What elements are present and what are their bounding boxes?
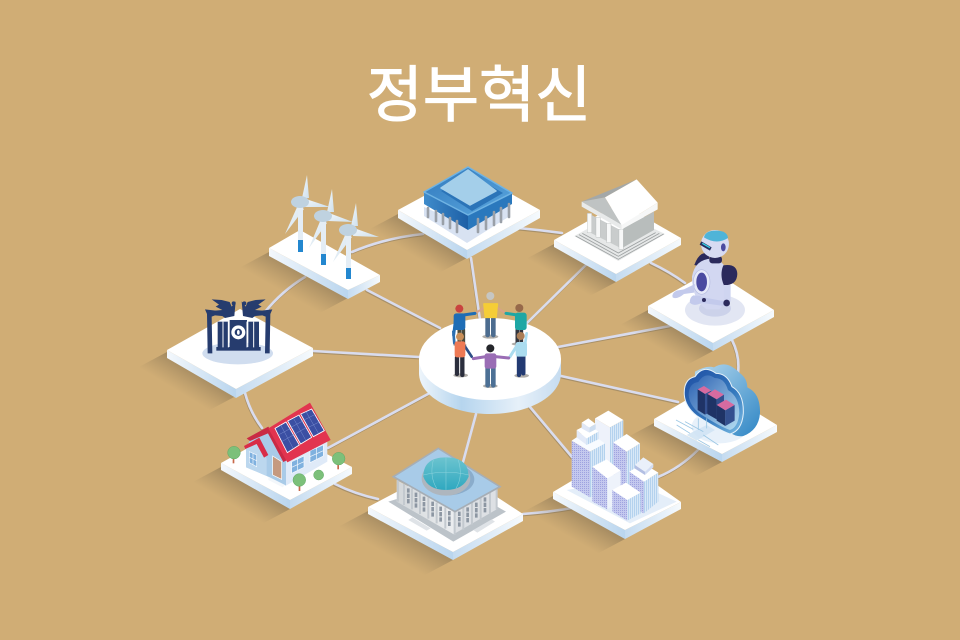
panel: solar house platform xyxy=(191,403,352,525)
panel: crest platform xyxy=(137,299,313,412)
icon: people holding hands in a circle xyxy=(453,292,529,388)
title: 정부혁신 xyxy=(367,61,591,129)
person: back centre, yellow shirt xyxy=(476,292,506,335)
icon: national assembly building xyxy=(388,448,506,542)
person: front centre, purple shirt xyxy=(473,344,509,385)
panel: robot platform xyxy=(618,230,774,367)
panel: central disc with people xyxy=(419,292,561,414)
connection lines xyxy=(244,228,738,515)
icon: national crest xyxy=(202,299,273,364)
panel: government building platform xyxy=(524,179,681,298)
panel: chip platform xyxy=(368,167,540,274)
icon: robot xyxy=(672,230,745,326)
icon: classical government building xyxy=(574,179,665,261)
panel: cloud platform xyxy=(624,364,777,478)
panel: city platform xyxy=(523,411,681,555)
icon: microchip xyxy=(424,167,512,243)
person: back right, teal shirt xyxy=(506,304,527,343)
icon: city towers xyxy=(567,411,677,523)
person: front left, orange vest xyxy=(453,332,472,375)
panel: wind power platform xyxy=(239,175,380,314)
icon: house with solar panels xyxy=(228,403,345,491)
icon: wind turbines xyxy=(285,175,379,279)
person: front right, light blue shirt xyxy=(510,332,527,375)
person: back left, blue shirt xyxy=(454,305,475,344)
icon: cloud server xyxy=(676,364,760,447)
panel: national assembly platform xyxy=(338,448,523,576)
